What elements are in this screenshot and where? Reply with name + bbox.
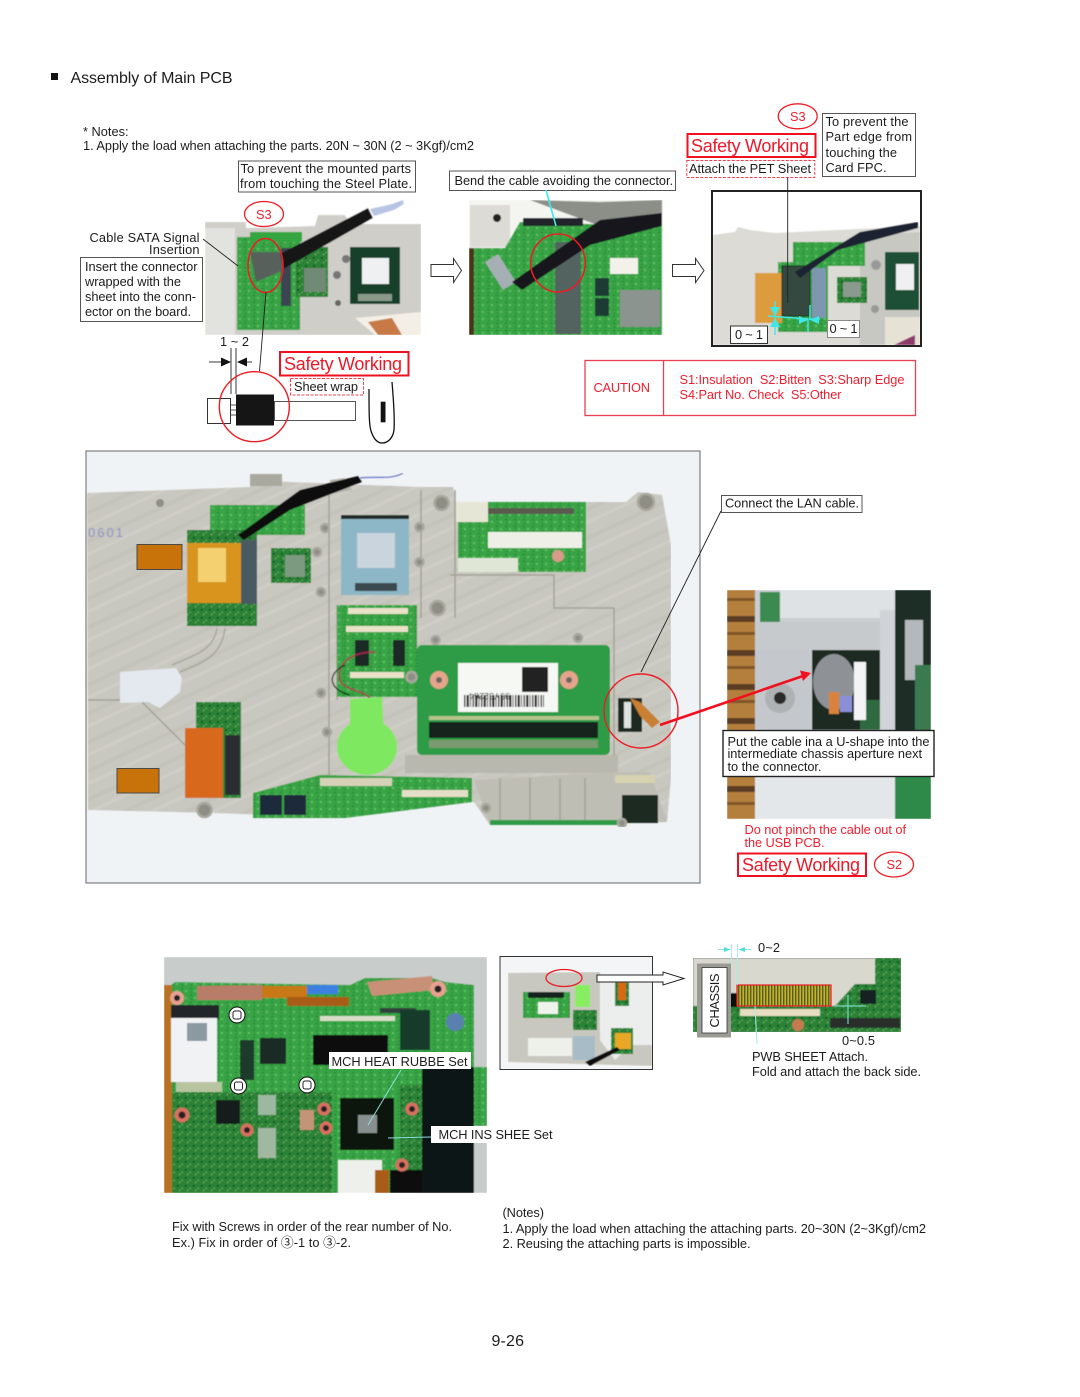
callout: insert the connector: Insert the connector	[85, 259, 198, 274]
notes: load: 1. Apply the load when attaching the parts. 20N ~ 30N (2 ~ 3Kgf)/cm2	[83, 138, 474, 153]
callout: insert the connector: ector on the board.	[85, 304, 191, 319]
callout: part edge: To prevent the	[826, 114, 908, 129]
tape: orange lower	[117, 768, 159, 793]
tape: orange upper	[137, 544, 182, 570]
callout: insert the connector: sheet into the conn-	[85, 289, 196, 304]
arrow: step 2 to 3	[672, 258, 704, 282]
note: PWB sheet attach: Fold and attach the back side.	[752, 1064, 921, 1079]
label: cable SATA signal	[90, 230, 238, 266]
callout: insert the connector	[80, 258, 202, 322]
label: attach PET sheet: Attach the PET Sheet	[689, 161, 811, 176]
arrow: step 1 to 2	[431, 258, 462, 282]
chassis body	[87, 480, 671, 825]
diagram: sheet wrap dimension: 1 ~ 2	[220, 334, 249, 349]
legend: caution: CAUTION	[594, 380, 650, 395]
callout: insert the connector: wrapped with the	[84, 274, 181, 289]
badge: S3: S3	[256, 207, 272, 222]
callout: part edge	[822, 114, 916, 176]
note: fix with screws: Fix with Screws in order of the rear number of No.	[172, 1219, 452, 1234]
dimension: 0~2: 0~2	[758, 940, 780, 955]
label: 0 ~ 1 right: 0 ~ 1	[830, 321, 858, 336]
legend: caution: S4:Part No. Check S5:Other	[680, 387, 842, 402]
label: 0 ~ 1 left: 0 ~ 1	[735, 327, 763, 342]
callout: mounted parts	[238, 161, 416, 192]
label: MCH heat rubber: MCH HEAT RUBBE Set	[332, 1054, 468, 1069]
photo: PET sheet attached	[712, 191, 921, 346]
callout: connect LAN cable	[641, 496, 862, 672]
photo: main board underside	[164, 957, 487, 1193]
heading: safety working 1: Safety Working	[284, 354, 402, 374]
callout: U-shape: Put the cable ina a U-shape into the	[728, 734, 930, 749]
arrow: red pointer	[660, 670, 811, 725]
label: cable SATA signal: Cable SATA Signal	[90, 230, 200, 245]
panel: main chassis photo: 99Y52264	[469, 691, 510, 701]
callout: part edge: touching the	[826, 145, 897, 160]
dimension: 0~2	[718, 940, 780, 985]
callout: mounted parts: from touching the Steel Plate.	[240, 176, 412, 191]
photo: cable bent avoiding connector	[469, 200, 663, 335]
note: do not pinch: the USB PCB.	[744, 835, 824, 850]
heading: safety working 3: Safety Working	[742, 855, 860, 875]
arrow: zoom to detail	[597, 972, 684, 985]
icon: screw mark 3	[299, 1077, 315, 1093]
notes: attaching parts	[502, 1205, 926, 1251]
title: Assembly of Main PCB	[70, 70, 232, 87]
panel: main chassis photo: 0601	[88, 525, 125, 540]
badge: S3 top: S3	[790, 109, 806, 124]
dimension: 0~0.5	[836, 995, 875, 1048]
photo: board overview	[500, 956, 684, 1070]
note: fix with screws	[172, 1219, 452, 1250]
notes: attaching parts: (Notes)	[502, 1205, 544, 1220]
callout: part edge: Part edge from	[826, 129, 912, 144]
badge: S2: S2	[886, 857, 902, 872]
label: 0 ~ 1 left	[730, 326, 768, 344]
leader: bend arrow	[546, 190, 556, 226]
diagram: sheet wrap dimension	[208, 292, 394, 443]
badge: S2	[874, 852, 914, 877]
callout: part edge: Card FPC.	[826, 160, 886, 175]
notes: attaching parts: 1. Apply the load when attaching the attaching parts. 20~30N (2~3Kgf)/cm2	[502, 1221, 926, 1236]
label: MCH ins sheet	[388, 1126, 556, 1143]
note: do not pinch: Do not pinch the cable out of	[744, 822, 906, 837]
note: do not pinch	[744, 822, 906, 850]
label: MCH heat rubber	[329, 1052, 471, 1125]
callout: U-shape	[723, 730, 934, 776]
leader: PET sheet	[787, 178, 789, 303]
marker: LAN circle	[604, 674, 678, 748]
label: sheet wrap: Sheet wrap	[294, 379, 358, 394]
photo: LAN connector detail	[727, 590, 931, 819]
badge: S3 top	[778, 104, 817, 129]
marker: bend circle	[531, 234, 585, 292]
icon: screw mark 2	[230, 1078, 246, 1094]
icon: screw mark 1	[229, 1007, 245, 1023]
callout: U-shape: intermediate chassis aperture next	[728, 746, 922, 761]
marker: insertion circle	[248, 238, 283, 292]
callout: U-shape: to the connector.	[728, 759, 822, 774]
legend: caution	[585, 360, 916, 416]
note: fix with screws: Ex.) Fix in order of ③-1 to ③-2.	[172, 1235, 351, 1250]
photo: SATA cable insertion	[205, 197, 421, 335]
panel: main chassis photo	[86, 451, 700, 883]
callout: mounted parts: To prevent the mounted parts	[240, 161, 411, 176]
label: MCH ins sheet: MCH INS SHEE Set	[438, 1127, 553, 1142]
dimension: 0~0.5: 0~0.5	[842, 1033, 875, 1048]
photo: PWB sheet detail	[693, 958, 901, 1032]
callout: bend the cable: Bend the cable avoiding the connector.	[454, 173, 673, 188]
notes: attaching parts: 2. Reusing the attaching parts is impossible.	[502, 1236, 750, 1251]
badge: S3	[244, 202, 284, 226]
label: chassis	[697, 964, 731, 1038]
callout: connect LAN cable: Connect the LAN cable.	[725, 496, 859, 510]
label: chassis: CHASSIS	[707, 973, 722, 1028]
legend: caution: S1:Insulation S2:Bitten S3:Sharp Edge	[680, 372, 904, 387]
sheet: yellow PWB sheet	[737, 985, 831, 1006]
dimension: PET sheet clearance	[768, 301, 820, 335]
notes: load	[83, 124, 474, 153]
marker: overview ellipse	[546, 970, 582, 986]
notes: load: * Notes:	[83, 124, 129, 139]
note: PWB sheet attach: PWB SHEET Attach.	[752, 1049, 868, 1064]
note: PWB sheet attach	[752, 1006, 921, 1079]
page number: 9-26	[492, 1333, 524, 1350]
label: cable SATA signal: Insertion	[149, 242, 200, 257]
heading: safety working 2: Safety Working	[691, 136, 809, 156]
